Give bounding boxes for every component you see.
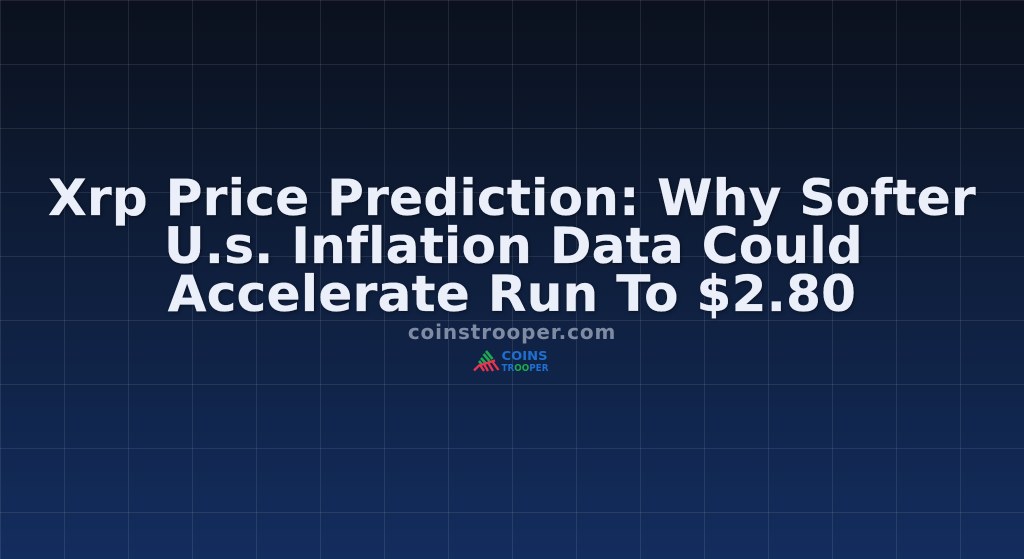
title: U.s. Inflation Data Could — [164, 217, 863, 275]
icon: coinstrooper logo: COINS — [502, 348, 548, 363]
title: Xrp Price Prediction: Why Softer — [48, 169, 976, 227]
source domain text: coinstrooper.com — [408, 320, 616, 344]
title — [48, 169, 978, 323]
icon: coinstrooper logo — [473, 348, 549, 374]
title: Accelerate Run To $2.80 — [168, 265, 856, 323]
icon: coinstrooper logo: TROOPER — [502, 363, 549, 374]
